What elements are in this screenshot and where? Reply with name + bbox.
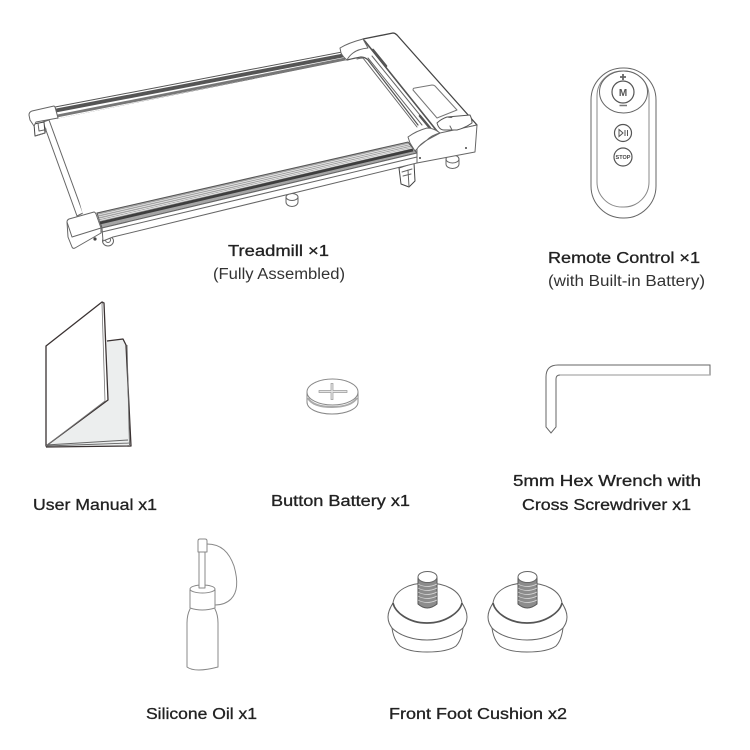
icon: hex wrench	[546, 365, 710, 433]
heading: user manual: User Manual x1	[33, 497, 157, 514]
heading: remote control: Remote Control ×1	[548, 250, 700, 267]
note: fully assembled: (Fully Assembled)	[213, 266, 345, 283]
inner pages	[46, 339, 131, 447]
icon: foot cushion left	[388, 572, 467, 652]
upper rail	[55, 52, 347, 119]
heading: hex wrench: Cross Screwdriver x1	[522, 497, 691, 514]
icon: foot cushion right	[488, 572, 567, 652]
icon: remote control: M	[619, 88, 627, 99]
icon: remote control	[591, 68, 656, 218]
side rear bar	[43, 120, 83, 216]
front left cap	[67, 212, 101, 248]
rear cap bracket	[34, 122, 45, 136]
icon: remote control: STOP	[616, 155, 631, 161]
lower rail	[97, 142, 417, 228]
rear right cap	[340, 39, 368, 60]
heading: silicone oil: Silicone Oil x1	[146, 706, 257, 723]
belt-side strip lines	[365, 41, 438, 132]
motor housing top	[363, 33, 477, 135]
icon: user manual	[46, 302, 131, 447]
heading: treadmill: Treadmill ×1	[228, 243, 329, 260]
icon: silicone oil	[187, 539, 237, 670]
housing front wall	[417, 125, 477, 163]
front cover	[46, 302, 108, 446]
icon: treadmill	[29, 33, 477, 248]
icon: button battery	[307, 379, 358, 414]
heading: foot cushion: Front Foot Cushion x2	[389, 706, 567, 723]
walking belt	[58, 58, 417, 213]
console panel	[413, 85, 457, 118]
bracket	[399, 163, 415, 187]
feet	[102, 236, 114, 246]
rear left cap	[29, 106, 58, 126]
heading: hex wrench: 5mm Hex Wrench with	[513, 473, 701, 490]
heading: hex wrench	[513, 473, 701, 514]
front right cap	[408, 128, 440, 151]
lower skirt	[102, 153, 417, 241]
note: built-in battery: (with Built-in Battery)	[548, 273, 705, 290]
heading: button battery: Button Battery x1	[271, 493, 410, 510]
lower tray	[437, 115, 472, 130]
